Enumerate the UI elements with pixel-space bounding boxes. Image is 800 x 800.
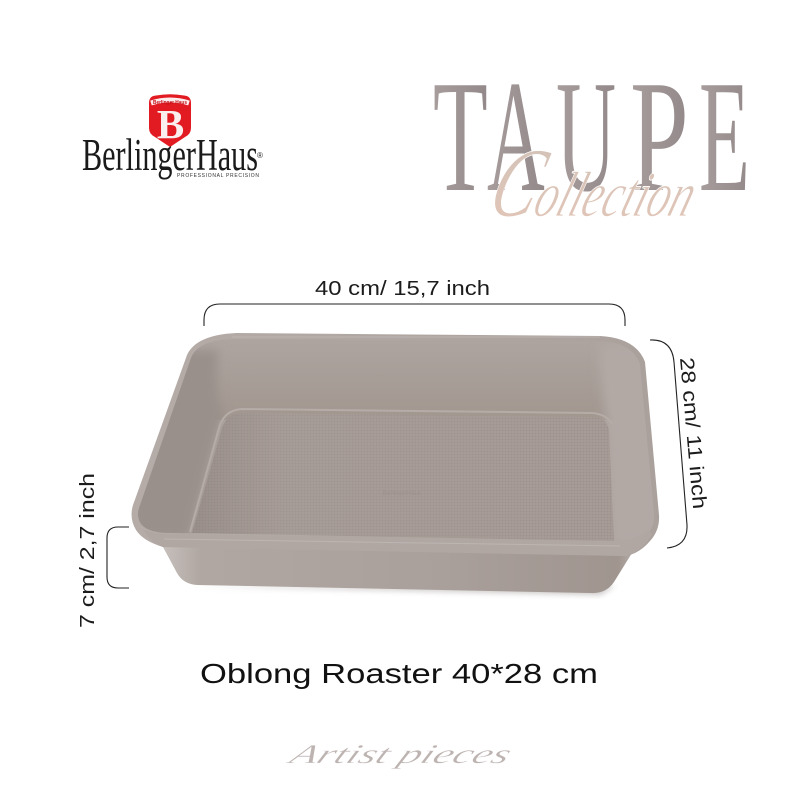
width label: 40 cm/ 15,7 inch	[315, 278, 490, 300]
pan right wall	[602, 354, 653, 538]
word: TAUPE: U	[556, 47, 616, 225]
embossed floor logo: BerlingerHaus	[383, 491, 421, 497]
word: TAUPE: A	[487, 48, 545, 225]
registered mark: ®	[257, 151, 263, 160]
height label: 7 cm/ 2,7 inch	[77, 473, 99, 628]
depth label: 28 cm/ 11 inch	[675, 357, 710, 510]
brand logo	[82, 94, 263, 180]
word: TAUPE: T	[433, 48, 488, 226]
word: TAUPE: E	[699, 47, 750, 225]
height bracket	[107, 527, 129, 588]
word: TAUPE: P	[630, 48, 689, 225]
pan floor shading	[192, 413, 614, 541]
infographic canvas	[79, 84, 746, 769]
collection title	[433, 47, 750, 238]
pan outer body	[163, 525, 632, 593]
tagline: Artist pieces	[282, 740, 517, 770]
logo wordmark: BerlingerHaus	[82, 130, 258, 180]
pan rim	[132, 333, 659, 556]
roaster pan	[130, 333, 660, 595]
pan back wall	[217, 350, 606, 420]
product name: Oblong Roaster 40*28 cm	[200, 658, 598, 689]
pan left wall	[138, 349, 224, 534]
rim top highlight	[164, 337, 620, 546]
logo shield	[149, 94, 191, 147]
pan shadow	[190, 586, 615, 595]
floor edge highlight	[190, 409, 612, 532]
width bracket	[204, 304, 625, 326]
height dimension	[77, 473, 129, 628]
word: TAUPE	[433, 47, 750, 226]
pan interior	[130, 335, 660, 545]
front rim band	[144, 530, 652, 556]
pan floor	[192, 413, 614, 541]
logo shield: B	[157, 101, 184, 147]
logo shield: Berlinger Haus	[153, 100, 187, 106]
word: Collection: Collection	[478, 129, 716, 238]
logo tagline: PROFESSIONAL PRECISION	[177, 173, 259, 179]
depth bracket	[650, 340, 687, 548]
depth dimension	[650, 340, 710, 548]
width dimension	[204, 278, 625, 326]
